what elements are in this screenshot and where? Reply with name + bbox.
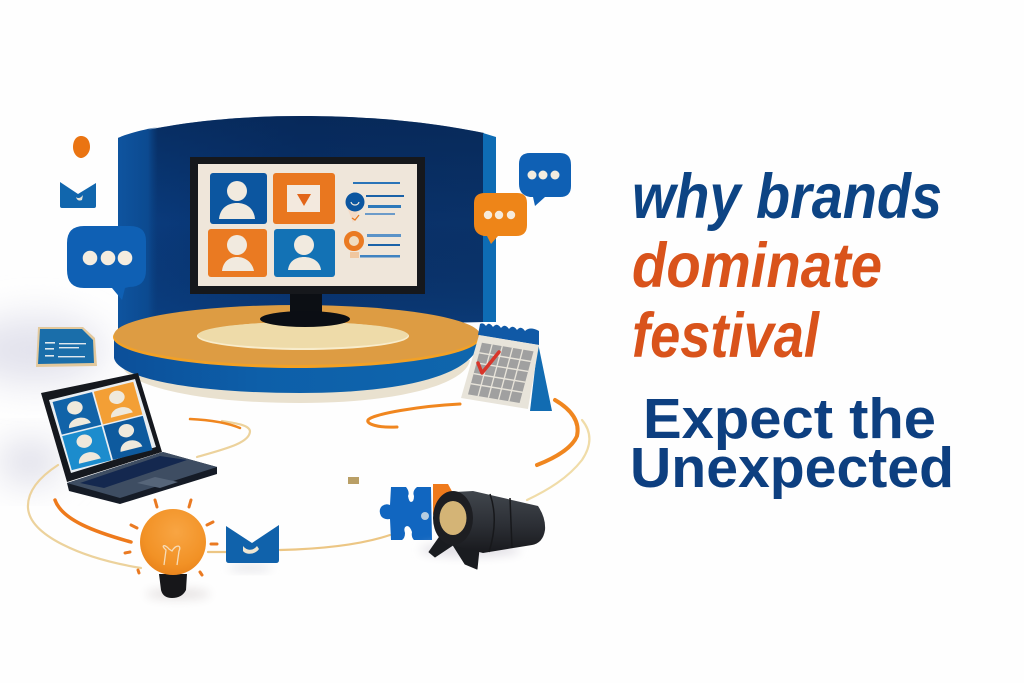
blue rim	[114, 338, 480, 393]
speech bubble: small blue	[519, 153, 571, 206]
laptop base	[67, 452, 217, 504]
spotlight body	[452, 491, 545, 553]
tile: person orange	[208, 229, 267, 277]
curved ribbon paths around the stage	[28, 400, 590, 568]
icon: document card	[36, 327, 97, 367]
screen	[198, 164, 417, 286]
wall right edge	[483, 133, 496, 322]
calendar grid	[468, 343, 534, 403]
subtitle: expect the unexpected	[630, 387, 954, 500]
calendar page	[461, 335, 539, 409]
info list top	[346, 182, 404, 223]
subtitle line: Expect the: Expect the	[643, 387, 936, 451]
title: why brands dominate festival	[632, 162, 942, 371]
stage back wall	[118, 116, 496, 332]
stand	[290, 292, 322, 316]
laptop lid	[41, 373, 162, 482]
bulb rays	[125, 500, 217, 575]
tile: person light blue	[274, 229, 335, 277]
heading line: festival: festival	[632, 301, 820, 371]
monitor	[190, 157, 425, 327]
icon: small cube	[348, 477, 359, 484]
spotlight lens	[433, 491, 473, 545]
subtitle line: Unexpected: Unexpected	[630, 436, 954, 500]
icon: orange balloon	[73, 136, 90, 158]
info list bottom	[346, 234, 401, 258]
laptop	[41, 373, 217, 504]
spotlight legs	[429, 532, 480, 569]
calendar back stand	[530, 343, 552, 411]
speech bubble: orange	[474, 193, 527, 244]
bezel	[190, 157, 425, 294]
heading line: dominate: dominate	[632, 231, 882, 301]
icon: light bulb	[125, 500, 217, 599]
icon: envelope bottom	[226, 525, 279, 570]
red check mark	[478, 352, 499, 373]
calendar binding	[478, 323, 539, 345]
laptop screen grid	[53, 382, 152, 470]
round stage	[113, 305, 481, 403]
keyboard	[80, 456, 187, 488]
heading line: why brands: why brands	[632, 162, 942, 232]
calendar	[461, 323, 552, 411]
stage top	[113, 306, 481, 368]
cream base	[122, 360, 470, 403]
inner disc	[197, 322, 409, 350]
orange arcs	[55, 400, 578, 542]
icon: envelope top left	[60, 182, 96, 208]
icon: spotlight	[420, 491, 545, 569]
tile: person blue	[210, 173, 267, 224]
icon: puzzle piece	[380, 484, 454, 540]
speech bubble: large blue	[67, 226, 146, 300]
tile: video orange	[273, 173, 335, 224]
